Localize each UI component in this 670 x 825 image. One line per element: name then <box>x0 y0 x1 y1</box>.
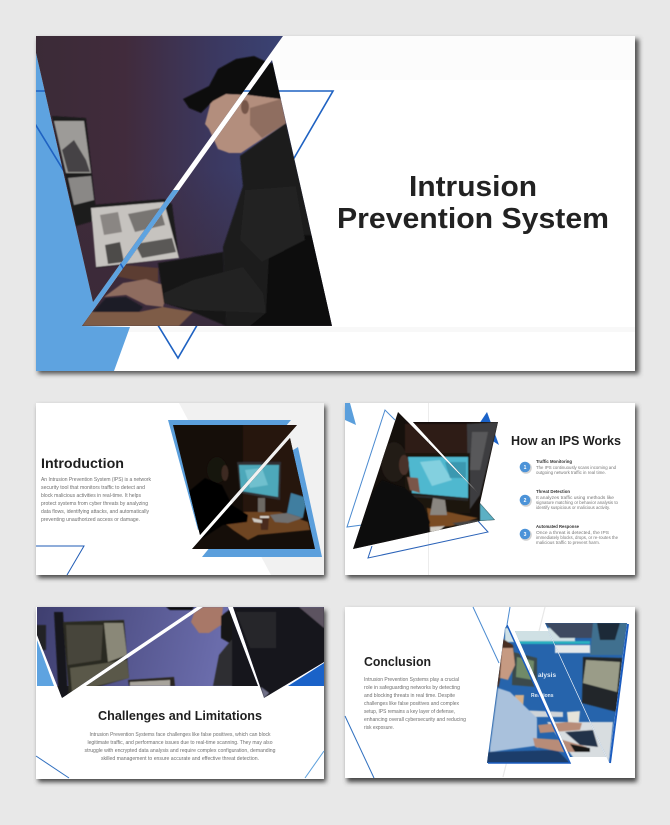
body text: and blocking threats in real time. Despite <box>364 693 455 699</box>
body text: setup, IPS remains a key layer of defense, <box>364 709 455 715</box>
title: Prevention System <box>337 203 609 235</box>
body text: struggle with encrypted data analysis and require complex configuration, demanding <box>84 748 276 754</box>
body text: preventing unauthorized access or damage. <box>41 517 140 523</box>
body text: challenges like false positives and complex <box>364 701 459 707</box>
body text <box>41 477 151 523</box>
blue frame <box>168 420 322 557</box>
body text: An Intrusion Prevention System (IPS) is a network <box>41 477 151 483</box>
body text: protect systems from cyber threats by analyzing <box>41 501 148 507</box>
photo: analyst in control room <box>485 620 630 765</box>
heading: Introduction <box>41 456 124 471</box>
step 2 <box>520 489 619 510</box>
heading: Challenges and Limitations <box>98 708 262 723</box>
jacket <box>222 123 312 326</box>
step 1 <box>520 459 617 475</box>
light blue corner shape <box>36 53 179 371</box>
step 3: 3 <box>524 532 527 538</box>
slide 1: title slide <box>15 36 639 374</box>
hands <box>111 265 158 282</box>
on-screen lettering: alysis <box>538 672 556 679</box>
body text: enhancing overall cybersecurity and reducing <box>364 717 466 723</box>
dark blue triangle outline <box>368 521 488 558</box>
slide 5: conclusion <box>345 607 637 782</box>
body text: data flows, identifying attacks, and automatically <box>41 509 149 515</box>
step 1: 1 <box>524 465 527 471</box>
body text <box>364 677 466 731</box>
on-screen lettering: Relations <box>531 693 554 699</box>
body text: risk exposure. <box>364 725 394 731</box>
body text <box>84 732 276 762</box>
step 2: identify suspicious or malicious activity. <box>536 505 610 510</box>
light blue accent lines <box>473 607 510 663</box>
step 3: immediately blocks, drops, or re-routes the <box>536 535 619 540</box>
heading: How an IPS Works <box>511 433 621 448</box>
centre monitor <box>91 199 179 268</box>
blue accent line <box>345 716 374 778</box>
left monitor <box>52 116 97 226</box>
step 3: Automated Response <box>536 524 580 529</box>
body text: security tool that monitors traffic to detect and <box>41 485 145 491</box>
body text: role in safeguarding networks by detecting <box>364 685 460 691</box>
step 1: The IPS continuously scans incoming and <box>536 465 617 470</box>
step 3: Once a threat is detected, the IPS <box>536 530 609 535</box>
slide 4: challenges and limitations <box>36 607 327 782</box>
blue triangle outline <box>36 546 84 575</box>
on-screen lettering <box>531 672 556 697</box>
dark blue photo edges <box>488 624 628 763</box>
keyboard <box>93 297 143 312</box>
faint grey line <box>503 607 545 777</box>
body text: Intrusion Prevention Systems face challenges like false positives, which can block <box>90 732 271 738</box>
dark blue triangle <box>475 412 499 445</box>
step 1: outgoing network traffic in real time. <box>536 470 606 475</box>
photo: analyst at desk <box>173 425 315 549</box>
light blue corner triangle <box>345 403 356 425</box>
light blue left triangle <box>37 640 54 686</box>
photo: analyst with monitor <box>350 410 500 550</box>
body text: skilled management to ensure accurate and effective threat detection. <box>101 756 259 762</box>
photo: operator at monitors <box>36 36 336 330</box>
dark blue right triangle <box>288 663 324 686</box>
step 2: 2 <box>524 498 527 504</box>
light blue triangle outline <box>347 410 395 527</box>
step 3 <box>520 524 619 545</box>
photo band: operator and monitors <box>36 607 327 702</box>
grey background wedge <box>179 403 324 575</box>
blue triangle outline <box>15 91 333 358</box>
heading: Conclusion <box>364 655 431 669</box>
step 2: signature matching or behavior analysis to <box>536 500 619 505</box>
desk <box>82 307 193 326</box>
title: Intrusion <box>409 171 537 203</box>
title <box>337 171 609 235</box>
step 3: malicious traffic to prevent harm. <box>536 540 600 545</box>
slide 3: how an IPS works <box>345 403 637 578</box>
face <box>205 94 286 153</box>
body text: legitimate traffic, and performance issues due to real-time scanning. They may also <box>88 740 273 746</box>
step 2: It analyzes traffic using methods like <box>536 495 615 500</box>
slide 2: introduction <box>36 403 326 578</box>
blue corner lines <box>36 751 324 778</box>
cap <box>183 56 281 113</box>
body text: Intrusion Prevention Systems play a crucial <box>364 677 459 683</box>
step 1: Traffic Monitoring <box>536 459 572 464</box>
body text: block malicious activities in real-time. It helps <box>41 493 141 499</box>
step 2: Threat Detection <box>536 489 570 494</box>
